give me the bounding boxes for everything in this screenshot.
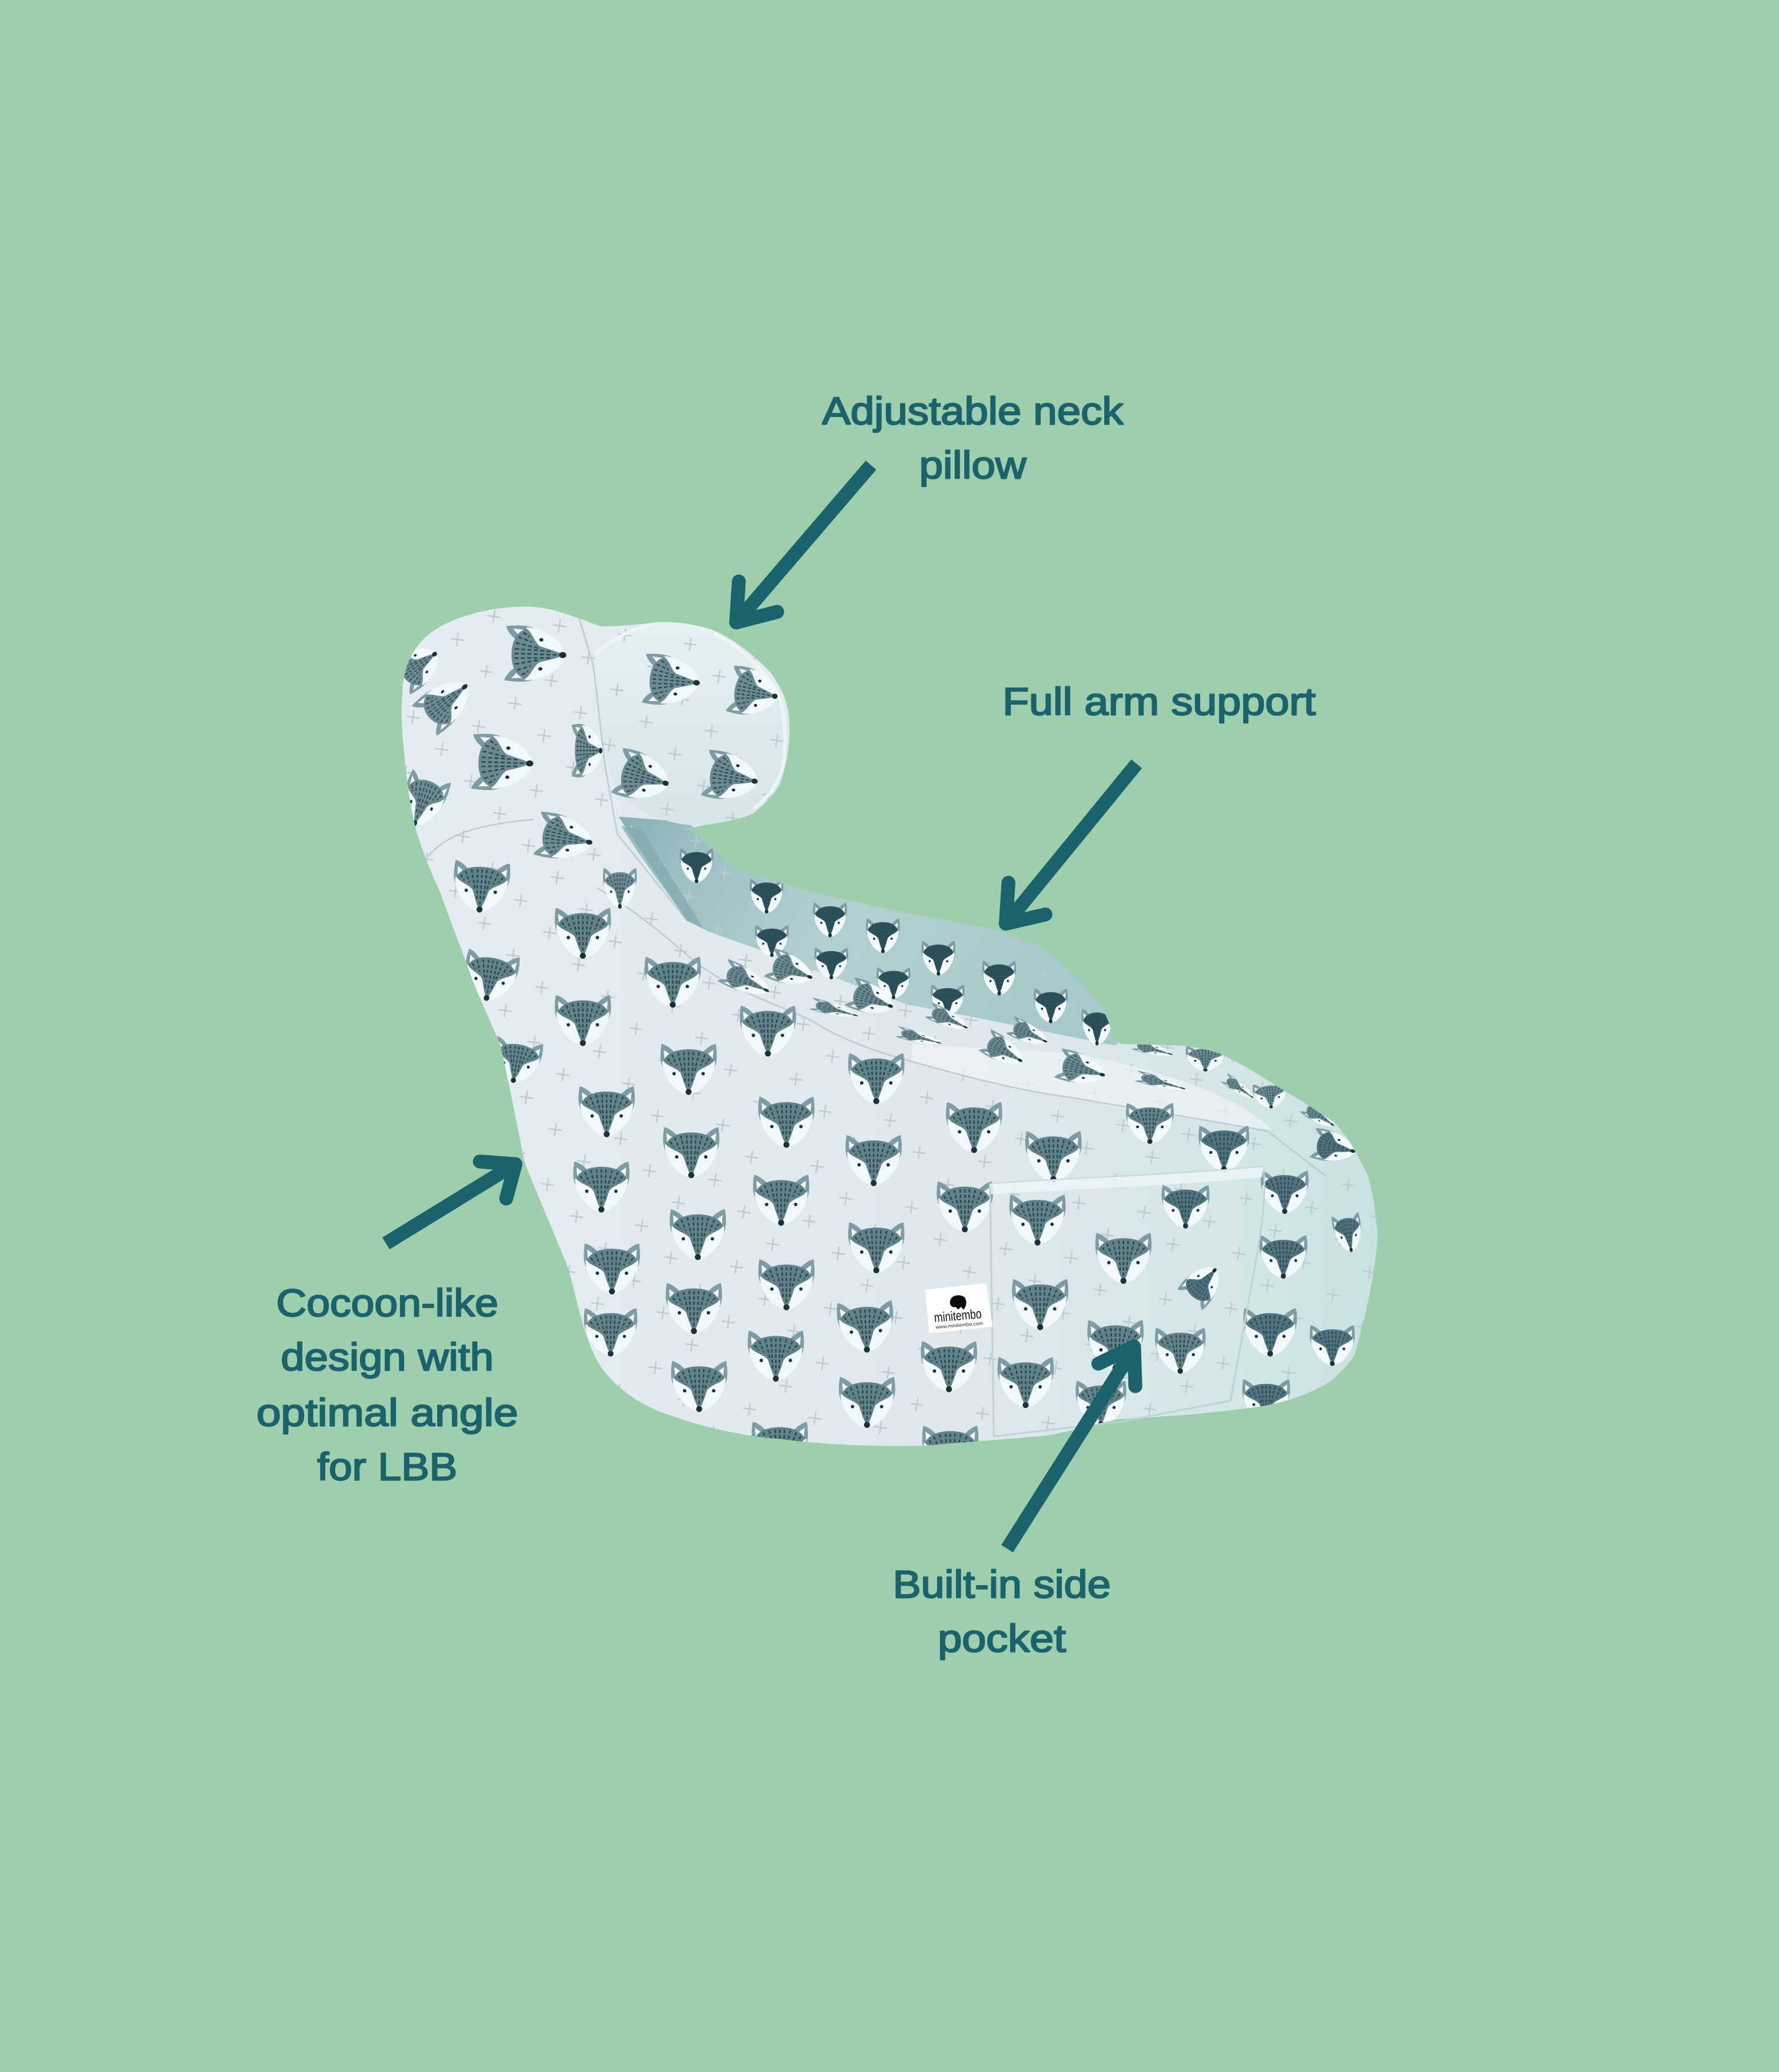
callout: cocoon-like design: design with bbox=[281, 1336, 494, 1379]
foxes: flattened on seat rim bbox=[717, 947, 1339, 1133]
callout: cocoon-like design: optimal angle bbox=[256, 1391, 518, 1434]
callout: cocoon-like design bbox=[256, 1282, 518, 1489]
fabric cross pattern bbox=[405, 610, 1377, 1444]
neck pillow roll bbox=[594, 622, 789, 825]
neck pillow crosses bbox=[594, 622, 789, 825]
arrow: cocoon design bbox=[386, 1162, 515, 1243]
neck pillow piping bbox=[595, 625, 785, 809]
callout: full arm support: Full arm support bbox=[1002, 680, 1316, 724]
fold shadow near neck bbox=[621, 826, 703, 927]
seam lines bbox=[425, 617, 1325, 1176]
callout: built-in side pocket bbox=[893, 1563, 1111, 1660]
brand name: minitembo bbox=[934, 1306, 982, 1325]
callout: adjustable neck pillow: Adjustable neck bbox=[822, 389, 1124, 433]
seat rim highlight bbox=[912, 1044, 1271, 1130]
foxes: headrest bbox=[388, 625, 782, 909]
brand label bbox=[925, 1283, 992, 1333]
callout: cocoon-like design: Cocoon-like bbox=[276, 1282, 498, 1325]
arrow: neck pillow bbox=[736, 465, 871, 622]
callout: adjustable neck pillow: pillow bbox=[920, 443, 1027, 487]
callout: adjustable neck pillow bbox=[822, 389, 1124, 487]
arrow: side pocket bbox=[1007, 1346, 1135, 1549]
brand website: www.minitembo.com bbox=[935, 1320, 984, 1330]
callout: built-in side pocket: pocket bbox=[938, 1617, 1066, 1660]
inner arm support panel bbox=[618, 817, 1118, 1045]
foxes: inner arm panel bbox=[679, 849, 1112, 1045]
fox print on fabric bbox=[388, 625, 1365, 1477]
infographic: annotated pillow on green background bbox=[258, 395, 1378, 1661]
arrow: arm support bbox=[1006, 764, 1137, 924]
product: pillow illustration bbox=[331, 555, 1454, 1480]
pillow main body bbox=[401, 607, 1378, 1446]
side pocket bbox=[990, 1167, 1264, 1436]
foxes: side panel bbox=[1162, 1126, 1365, 1423]
icon: elephant logo bbox=[950, 1295, 967, 1310]
foxes: front panel bbox=[451, 860, 1205, 1477]
callout: cocoon-like design: for LBB bbox=[317, 1445, 457, 1489]
callout: built-in side pocket: Built-in side bbox=[893, 1563, 1111, 1606]
